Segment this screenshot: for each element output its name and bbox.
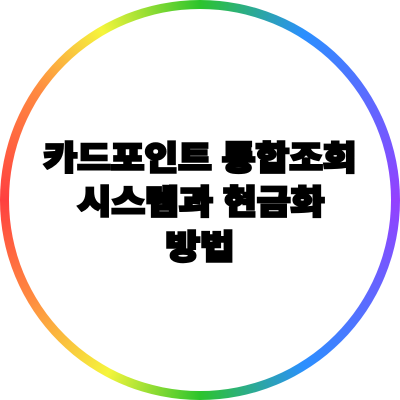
title: 시스템과 현금화 — [78, 184, 324, 220]
title: 카드포인트 통합조회 — [44, 140, 356, 176]
title: 방법 — [166, 228, 234, 266]
